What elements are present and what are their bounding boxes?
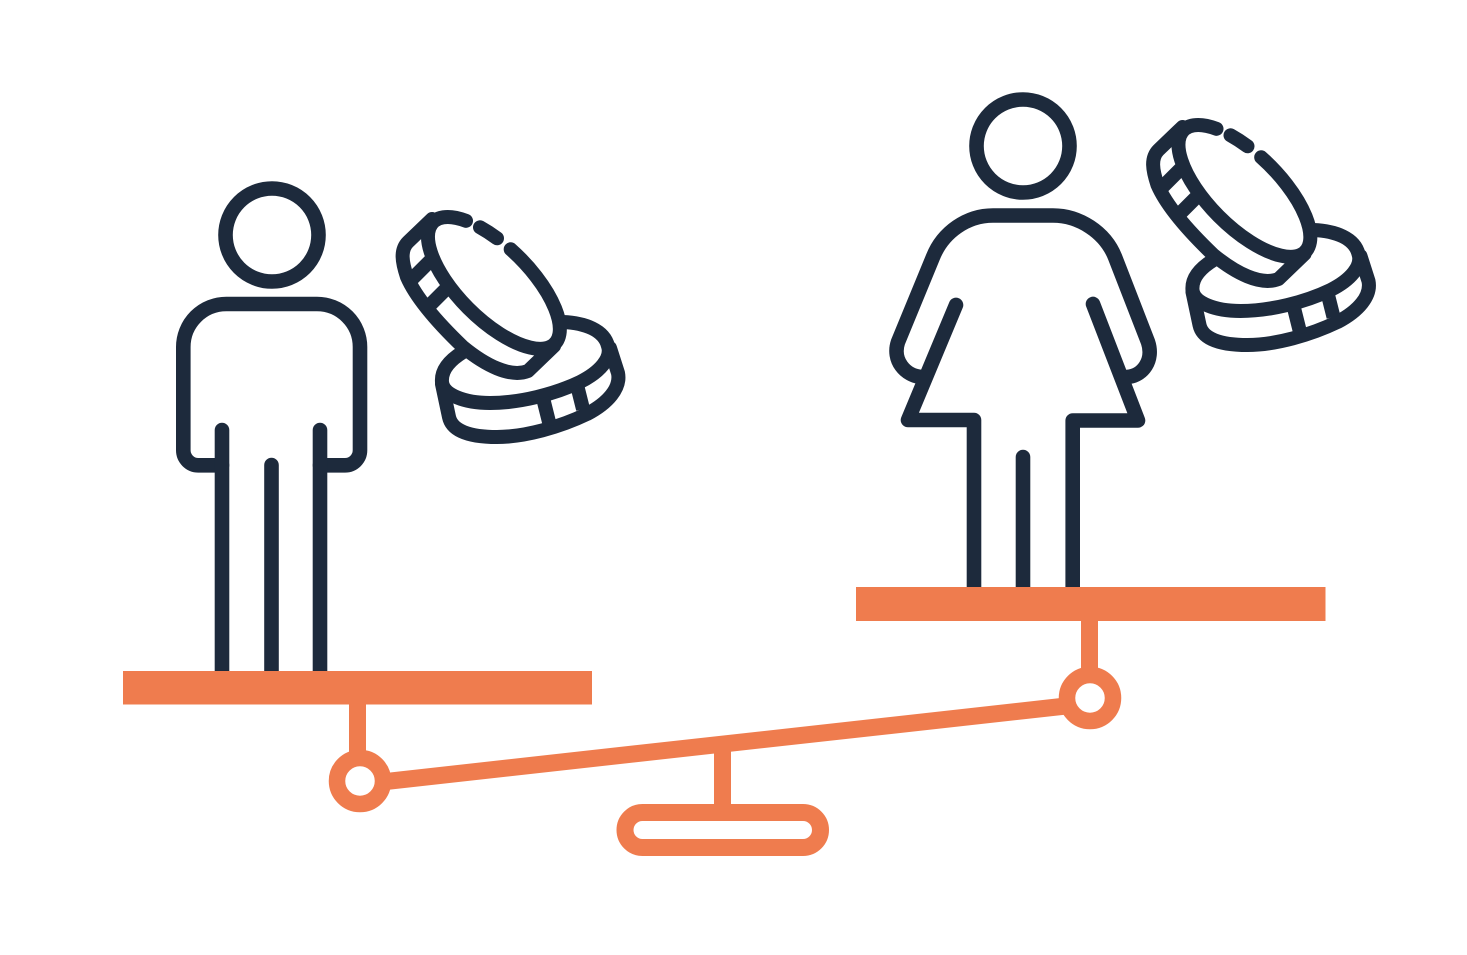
woman head <box>976 100 1070 192</box>
icon: coins right <box>1153 125 1369 345</box>
woman right arm and hem <box>1073 304 1138 591</box>
seesaw base <box>625 812 820 848</box>
seesaw <box>337 617 1113 848</box>
left post <box>349 700 366 760</box>
woman dress <box>897 216 1150 377</box>
right platform <box>856 587 1326 621</box>
man legs <box>222 430 320 675</box>
man head <box>226 188 318 282</box>
seesaw beam <box>375 705 1075 783</box>
icon: coins left <box>403 217 618 437</box>
left platform <box>123 671 592 704</box>
seesaw fulcrum post <box>714 745 731 807</box>
icon: woman <box>897 100 1150 591</box>
right pivot <box>1067 675 1113 721</box>
woman left arm and hem <box>908 305 974 591</box>
woman centre leg <box>1016 457 1030 591</box>
right post <box>1081 617 1098 675</box>
left pivot <box>337 758 383 804</box>
man torso <box>183 304 360 465</box>
icon: man <box>183 188 360 675</box>
